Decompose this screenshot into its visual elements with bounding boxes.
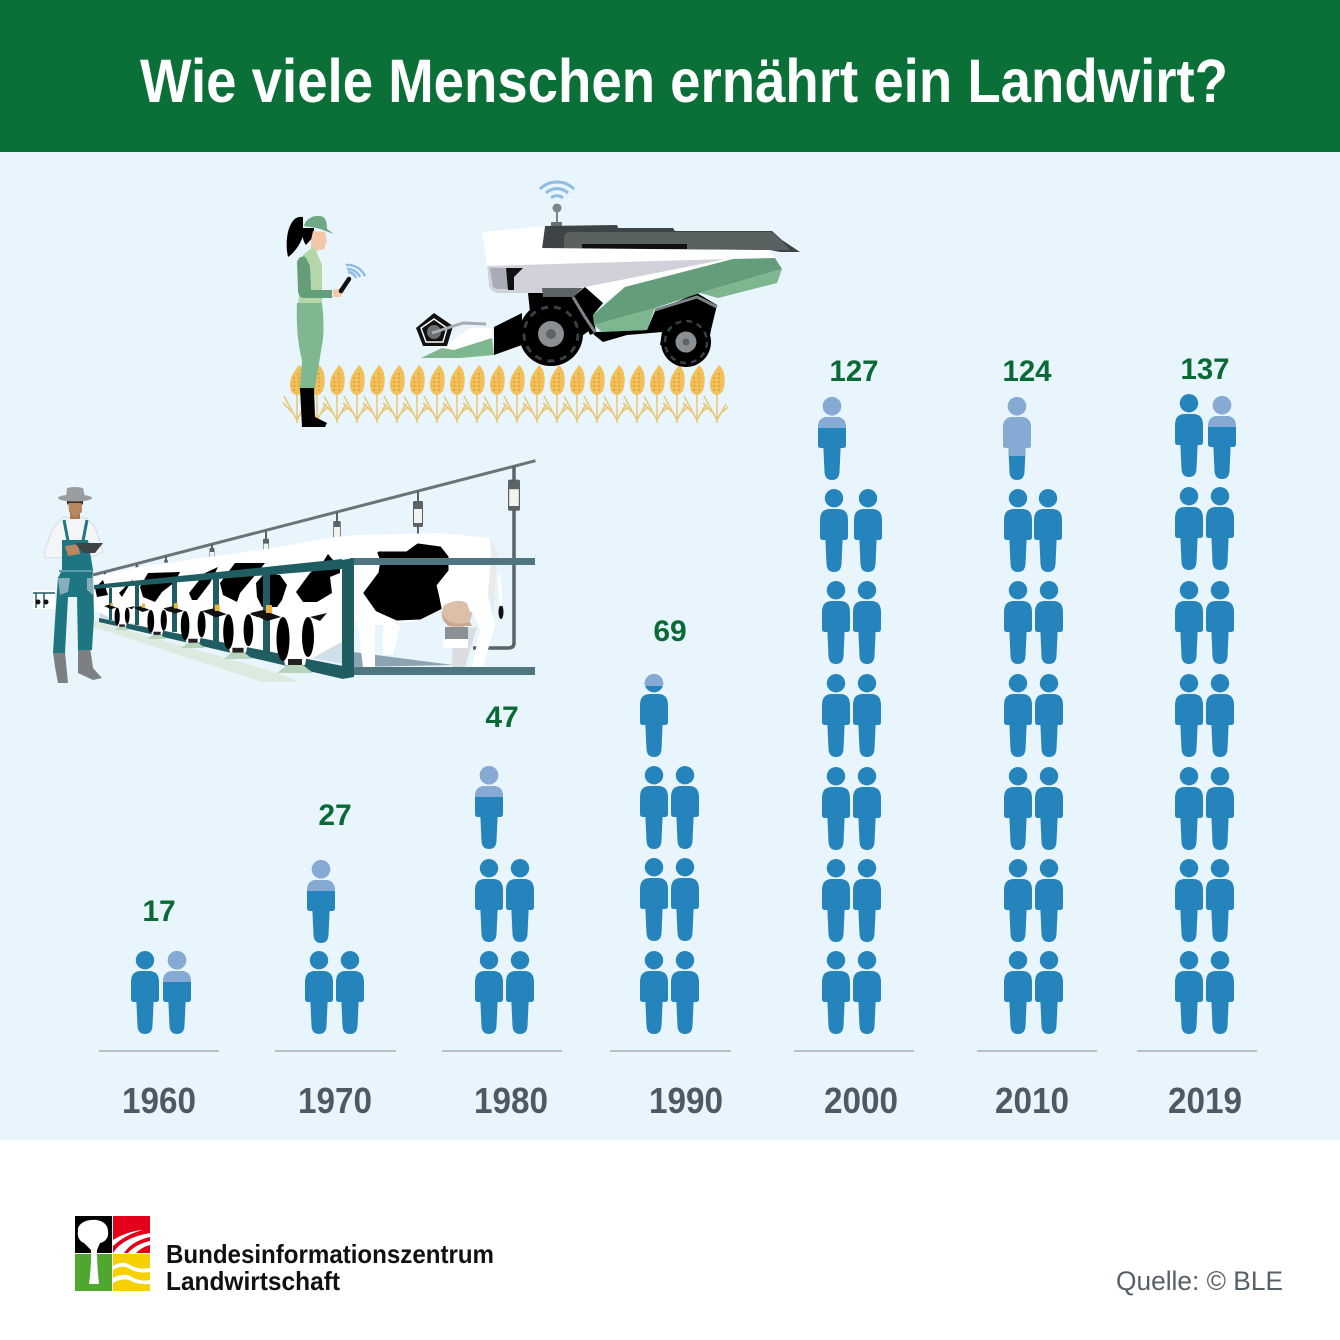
- title: Wie viele Menschen ernährt ein Landwirt?: [140, 47, 1228, 115]
- chassis: [528, 293, 590, 345]
- axis 1970: [275, 1050, 396, 1052]
- front wheel: [519, 302, 583, 366]
- overhead milk rail: [93, 461, 535, 648]
- header: [416, 313, 522, 358]
- year 2010: 2010: [995, 1080, 1069, 1121]
- column: 2010: [977, 355, 1097, 1121]
- value 69: 69: [653, 615, 687, 648]
- year 1990: 1990: [649, 1080, 723, 1121]
- value 47: 47: [485, 701, 519, 734]
- column: 1980: [442, 701, 562, 1121]
- pictogram 1960: [131, 951, 191, 1034]
- value 27: 27: [318, 799, 352, 832]
- cow black patches: [95, 545, 447, 619]
- illustration: farmer woman with tablet: [287, 216, 365, 427]
- white wedge: [585, 259, 733, 303]
- green panels: [593, 258, 782, 325]
- logo wordmark: Bundesinformationszentrum: [166, 1239, 494, 1269]
- column: 2000: [794, 355, 914, 1121]
- pictogram 2019: [1175, 394, 1236, 1034]
- stall frame: [94, 558, 535, 679]
- white cab: [482, 226, 776, 266]
- axis 2000: [794, 1050, 914, 1052]
- pictogram 1970: [305, 860, 364, 1034]
- pictogram 1990: [640, 674, 699, 1034]
- year 1970: 1970: [298, 1080, 372, 1121]
- pictogram 1980: [475, 766, 534, 1034]
- cows bodies: [93, 533, 498, 667]
- source note: Quelle: © BLE: [1116, 1266, 1283, 1296]
- header band: [0, 0, 1340, 152]
- hind leg behind: [452, 627, 477, 667]
- wifi antenna: [540, 182, 574, 227]
- value 127: 127: [830, 355, 878, 388]
- column: 1970: [275, 799, 396, 1121]
- year 1980: 1980: [474, 1080, 548, 1121]
- axis 2019: [1137, 1050, 1257, 1052]
- logo wordmark: [166, 1239, 494, 1296]
- grey stall floor: [353, 652, 453, 667]
- year 2000: 2000: [824, 1080, 898, 1121]
- dark roof and unloading auger: [542, 225, 800, 252]
- value 124: 124: [1002, 355, 1052, 388]
- logo mark: [75, 1216, 150, 1291]
- axis 1990: [610, 1050, 731, 1052]
- pictogram 2000: [818, 397, 882, 1034]
- pictogram 2010: [1003, 397, 1063, 1034]
- illustration: autonomous combine harvester: [416, 182, 800, 367]
- axis 2010: [977, 1050, 1097, 1052]
- grey body: [487, 258, 727, 293]
- value 17: 17: [142, 895, 176, 928]
- floor strip: [90, 620, 300, 682]
- axis 1980: [442, 1050, 562, 1052]
- rear wheel: [661, 317, 711, 367]
- distant stalls: [33, 590, 55, 609]
- background panel: [0, 152, 1340, 1140]
- value 137: 137: [1180, 353, 1230, 386]
- illustration: milking stall: [33, 461, 536, 682]
- column: 1990: [610, 615, 731, 1121]
- illustration: farmer man with tablet: [44, 487, 103, 683]
- column: 2019: [1137, 353, 1257, 1121]
- axis 1960: [99, 1050, 219, 1052]
- udder: [441, 598, 472, 648]
- year 1960: 1960: [122, 1080, 196, 1121]
- logo wordmark: Landwirtschaft: [166, 1266, 340, 1296]
- illustration: wheat row: [283, 365, 728, 423]
- cow heads: [104, 603, 327, 673]
- column: 1960: [99, 895, 219, 1121]
- year 2019: 2019: [1168, 1080, 1242, 1121]
